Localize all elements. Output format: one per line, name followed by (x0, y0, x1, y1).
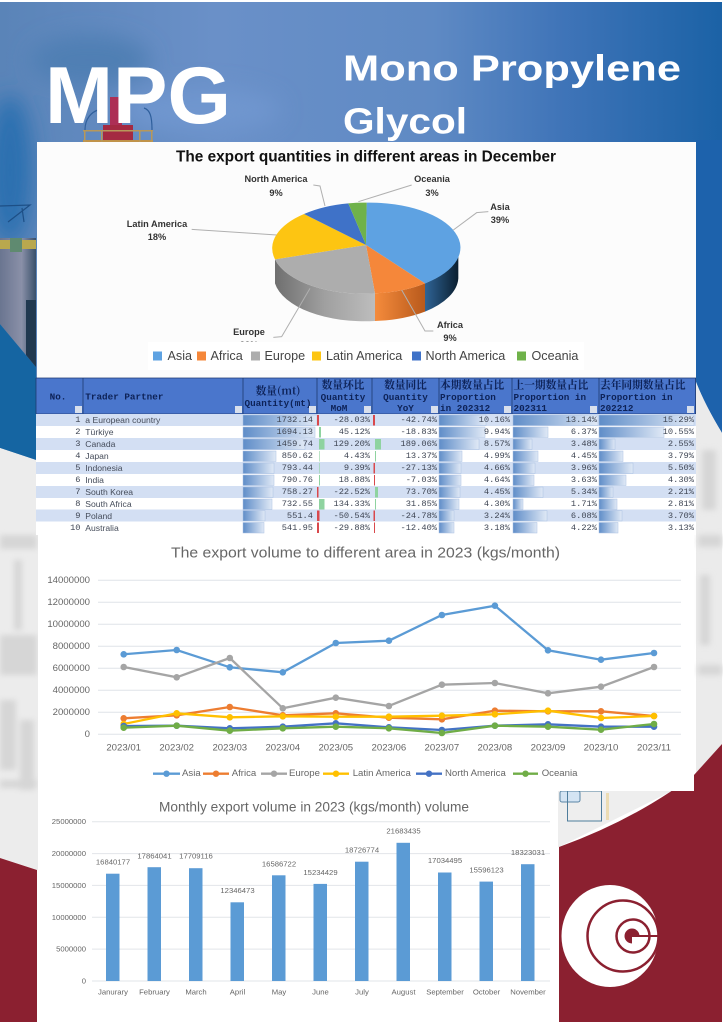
line chart legend: Oceania (542, 768, 578, 779)
table month-on-month column: 18.88% (339, 475, 371, 485)
table year-on-year column: -12.40% (400, 523, 438, 533)
bar chart y axis: 15000000 (52, 881, 86, 890)
table proportion 202312 column: 3.18% (484, 523, 511, 533)
bar chart value labels: 17034495 (428, 856, 462, 865)
pie label: North America: 9% (269, 188, 283, 198)
pie label: Oceania: 3% (425, 188, 439, 198)
table row numbers and partners: Canada (85, 439, 116, 449)
pie label: Europe: 22% (240, 340, 258, 350)
line chart x axis: 2023/02 (159, 742, 194, 754)
table quantity column: 1694.13 (276, 427, 313, 437)
table month-on-month column: -29.88% (334, 523, 371, 533)
bar chart month labels: March (185, 988, 207, 996)
table month-on-month column: 134.33% (334, 499, 371, 509)
table header: Trader Partner (85, 392, 163, 402)
line chart y axis: 12000000 (47, 597, 90, 608)
line chart legend: Europe (289, 768, 320, 779)
table month-on-month column (334, 415, 371, 533)
panel: pie chart (37, 142, 696, 378)
line chart x axis: 2023/04 (265, 742, 301, 754)
line chart x axis: 2023/06 (372, 742, 406, 754)
table row numbers and partners: 2 (75, 427, 80, 437)
panel: trader partner table (36, 378, 696, 535)
table proportion 202311 column: 5.34% (571, 487, 598, 497)
table proportion 202212 column: 2.55% (668, 439, 695, 449)
title: Glycol: Glycol (343, 100, 467, 142)
table row numbers and partners: India (85, 475, 104, 485)
line chart y axis: 10000000 (47, 619, 90, 630)
bar chart value labels: 17709116 (179, 852, 213, 860)
line series: North America (120, 720, 657, 733)
table proportion 202212 column: 2.81% (668, 499, 695, 509)
table proportion 202312 column: 4.99% (484, 451, 511, 461)
table proportion 202312 column: 8.57% (484, 439, 511, 449)
bar chart grid (92, 822, 550, 981)
table year-on-year column: 189.06% (400, 439, 438, 449)
bar chart y axis: 25000000 (52, 817, 86, 826)
table proportion 202312 column (479, 415, 511, 533)
table proportion 202212 column: 2.21% (668, 487, 695, 497)
table header: 数量环比 (322, 378, 365, 392)
pie label: Asia: Asia (490, 202, 511, 212)
line chart x axis: 2023/03 (212, 742, 247, 754)
table row stripes (36, 414, 696, 522)
table proportion 202212 column (663, 415, 695, 533)
table header: Quantity (321, 392, 366, 403)
table row numbers and partners: 10 (70, 523, 80, 533)
table row numbers and partners: a European country (85, 415, 161, 425)
table month-on-month column: -28.03% (334, 415, 371, 425)
table proportion 202312 column: 4.64% (484, 475, 511, 485)
table quantity column: 1459.74 (276, 439, 313, 449)
title: Mono Propylene: Mono Propylene (343, 48, 681, 88)
table proportion 202311 column: 3.96% (571, 463, 598, 473)
table proportion 202212 column: 15.29% (663, 415, 695, 425)
table proportion 202312 column: 9.94% (484, 427, 511, 437)
table row numbers and partners (70, 415, 161, 533)
pie label: Latin America: 18% (148, 232, 166, 242)
table year-on-year column: 73.70% (406, 487, 438, 497)
table row numbers and partners: Australia (85, 523, 119, 533)
pie graphic (192, 185, 488, 337)
table year-on-year column (400, 415, 438, 533)
line chart y axis: 14000000 (47, 575, 90, 586)
table header: 去年同期数量占比 (600, 378, 686, 392)
bar chart month labels: July (355, 988, 369, 996)
bar chart month labels: September (426, 988, 464, 996)
table month-on-month column: -50.54% (334, 511, 371, 521)
table header: 本期数量占比 (440, 378, 504, 392)
line chart x axis: 2023/09 (531, 742, 565, 754)
table header: 上一期数量占比 (514, 378, 589, 392)
table proportion 202312 column: 10.16% (479, 415, 511, 425)
table quantity column: 732.55 (282, 499, 313, 509)
bar chart y axis: 5000000 (56, 945, 86, 954)
table proportion 202311 column: 3.63% (571, 475, 598, 485)
table row numbers and partners: 6 (75, 475, 80, 485)
icon: company logo (562, 885, 659, 987)
table proportion 202311 column: 13.14% (566, 415, 598, 425)
table header: Quantity (383, 392, 428, 403)
line chart legend: Latin America (353, 768, 411, 779)
pie label: Oceania (414, 174, 451, 198)
table header: Proportion (440, 392, 496, 403)
line chart legend: Africa (232, 768, 257, 779)
pie label: Asia (490, 202, 511, 225)
bar chart month labels: October (473, 988, 501, 996)
pie heading: The export quantities in different areas in December (176, 148, 556, 166)
table row numbers and partners: South Korea (85, 487, 133, 497)
background: plant photo strip (0, 238, 36, 367)
table header: Quantity(mt) (245, 398, 311, 409)
line chart grid (98, 580, 681, 734)
bar chart value labels: 16586722 (262, 860, 296, 868)
bar chart month labels: June (312, 988, 329, 996)
bar chart value labels: 12346473 (220, 886, 255, 895)
pie legend: Latin America (326, 349, 402, 363)
pie label: Europe: Europe (233, 327, 265, 337)
bar chart value labels: 17864041 (137, 852, 172, 860)
line chart x axis: 2023/07 (425, 742, 459, 754)
table row numbers and partners: Indonesia (85, 463, 123, 473)
pie label: Africa: Africa (437, 320, 464, 330)
table row numbers and partners: South Africa (85, 499, 132, 509)
bar chart value labels: 18726774 (345, 846, 380, 854)
line series: Latin America (120, 707, 657, 727)
pie label: North America: North America (245, 174, 308, 184)
table header: Proportion in (514, 392, 586, 403)
table year-on-year column: -24.78% (400, 511, 438, 521)
pie legend: Africa (210, 349, 243, 363)
bar chart heading: Monthly export volume in 2023 (kgs/month) volume (159, 800, 469, 814)
bar chart value labels: 16840177 (96, 858, 130, 866)
pie legend (148, 342, 584, 370)
line chart heading: The export volume to different area in 2023 (kgs/month) (171, 544, 560, 562)
bar chart month labels: April (230, 988, 245, 996)
pie label: Africa: 9% (443, 333, 457, 343)
background: right dark red block (559, 744, 722, 1022)
line chart x axis: 2023/01 (106, 742, 141, 754)
table row numbers and partners: 9 (75, 511, 80, 521)
table year-on-year column: 31.85% (406, 499, 438, 509)
bar chart value labels (96, 826, 545, 895)
background: blue sky header (0, 2, 722, 480)
background: grey plant texture (0, 382, 722, 870)
table proportion 202312 column: 4.30% (484, 499, 511, 509)
table proportion 202312 column: 4.66% (484, 463, 511, 473)
line series: Europe (120, 655, 657, 712)
table proportion 202212 column: 3.13% (668, 523, 695, 533)
table proportion 202212 column: 10.55% (663, 427, 695, 437)
table header: 数量同比 (384, 378, 427, 392)
line chart y axis: 8000000 (53, 641, 90, 652)
table header: Proportion in (600, 392, 673, 403)
table proportion 202311 column: 6.37% (571, 427, 598, 437)
bar chart month labels: May (272, 988, 286, 996)
table quantity column: 1732.14 (276, 415, 313, 425)
table year-on-year column: 13.37% (406, 451, 438, 461)
line chart y axis: 0 (85, 729, 90, 740)
table month-on-month column: 9.39% (344, 463, 371, 473)
table change bars (317, 415, 381, 533)
table header (36, 378, 696, 414)
pie label: Latin America: Latin America (127, 219, 188, 229)
table proportion 202311 column: 6.08% (571, 511, 598, 521)
bar chart y axis (52, 817, 86, 986)
bar chart value labels: 15596123 (469, 866, 504, 874)
bar chart bars (106, 843, 534, 981)
bar chart month labels: Janurary (98, 988, 128, 996)
table year-on-year column: -42.74% (400, 415, 438, 425)
table proportion 202212 column: 5.50% (668, 463, 695, 473)
bar chart y axis: 0 (82, 976, 86, 986)
table quantity column: 790.76 (282, 475, 313, 485)
icon: process pipe sketch (560, 791, 609, 821)
table quantity column: 551.4 (287, 511, 313, 521)
bar chart month labels: February (139, 988, 170, 996)
pie label: Europe (233, 327, 265, 350)
table row numbers and partners: 8 (75, 499, 80, 509)
table year-on-year column: -27.13% (400, 463, 438, 473)
table data bars (243, 415, 694, 533)
table quantity column: 758.27 (282, 487, 313, 497)
table header: No. (50, 392, 66, 402)
table proportion 202311 column: 4.22% (571, 523, 598, 533)
line chart legend (153, 768, 578, 779)
table quantity column: 793.44 (282, 463, 313, 473)
table proportion 202311 column: 4.45% (571, 451, 598, 461)
table header: 数量(mt) (256, 384, 300, 398)
table proportion 202212 column: 3.79% (668, 451, 695, 461)
line chart x axis: 2023/08 (478, 742, 512, 754)
pie legend: North America (426, 349, 505, 363)
table proportion 202311 column: 1.71% (571, 499, 598, 509)
table row numbers and partners: Poland (85, 511, 112, 521)
pie label: Asia: 39% (491, 215, 509, 225)
table row numbers and partners: 7 (75, 487, 80, 497)
bar chart month labels (98, 988, 546, 996)
bar chart y axis: 20000000 (52, 849, 86, 858)
table proportion 202312 column: 4.45% (484, 487, 511, 497)
table header: 202311 (514, 403, 547, 414)
table header: in 202312 (440, 403, 491, 414)
line chart legend: Asia (182, 768, 201, 779)
table year-on-year column: -7.03% (406, 475, 438, 485)
table row numbers and partners: 3 (75, 439, 80, 449)
line chart y axis (47, 575, 90, 740)
pie label: Africa (437, 320, 464, 343)
bar chart y axis: 10000000 (52, 913, 86, 922)
table proportion 202311 column (566, 415, 598, 533)
pie label: Latin America (127, 219, 188, 242)
icon: chimney and platform (83, 97, 153, 143)
table quantity column: 850.62 (282, 451, 313, 461)
table row numbers and partners: 4 (75, 451, 80, 461)
bar chart value labels: 18323031 (511, 848, 545, 857)
line chart y axis: 6000000 (53, 663, 90, 674)
line series: Africa (120, 704, 657, 723)
bar chart month labels: August (392, 988, 416, 996)
pie legend: Europe (264, 349, 305, 363)
table header: 202212 (600, 403, 634, 414)
table row numbers and partners: 1 (75, 415, 80, 425)
table proportion 202212 column: 3.70% (668, 511, 695, 521)
table row numbers and partners: Japan (85, 451, 109, 461)
line chart legend: North America (445, 768, 506, 779)
panel: bar chart (38, 791, 558, 1022)
table quantity column (276, 415, 313, 533)
pie legend: Asia (168, 349, 192, 363)
background: left dark red block (0, 858, 37, 1022)
bar chart value labels: 21683435 (386, 826, 421, 836)
pie legend: Oceania (532, 349, 578, 363)
line chart x axis: 2023/05 (318, 742, 353, 754)
line chart y axis: 4000000 (53, 685, 90, 696)
table proportion 202312 column: 3.24% (484, 511, 511, 521)
bar chart value labels: 15234429 (303, 868, 338, 877)
line series: Oceania (120, 721, 657, 736)
pie label: North America (245, 174, 308, 198)
table proportion 202311 column: 3.48% (571, 439, 598, 449)
line chart x axis: 2023/11 (637, 742, 671, 754)
table quantity column: 541.95 (282, 523, 313, 533)
line chart y axis: 2000000 (53, 707, 90, 718)
bar chart month labels: November (510, 988, 546, 996)
line chart x axis: 2023/10 (584, 742, 618, 754)
line chart x axis (106, 742, 671, 754)
table year-on-year column: -18.83% (400, 427, 438, 437)
pie label: Oceania: Oceania (414, 174, 451, 184)
line series: Asia (120, 602, 657, 676)
table month-on-month column: -22.52% (334, 487, 371, 497)
panel: line chart (38, 535, 694, 791)
table header: YoY (397, 403, 414, 414)
title: MPG: MPG (45, 51, 231, 141)
table row numbers and partners: Türkiye (85, 427, 114, 437)
table row numbers and partners: 5 (75, 463, 80, 473)
table proportion 202212 column: 4.30% (668, 475, 695, 485)
table month-on-month column: 4.43% (344, 451, 371, 461)
table header: MoM (331, 403, 348, 414)
table month-on-month column: 45.12% (339, 427, 371, 437)
table month-on-month column: 129.20% (334, 439, 371, 449)
